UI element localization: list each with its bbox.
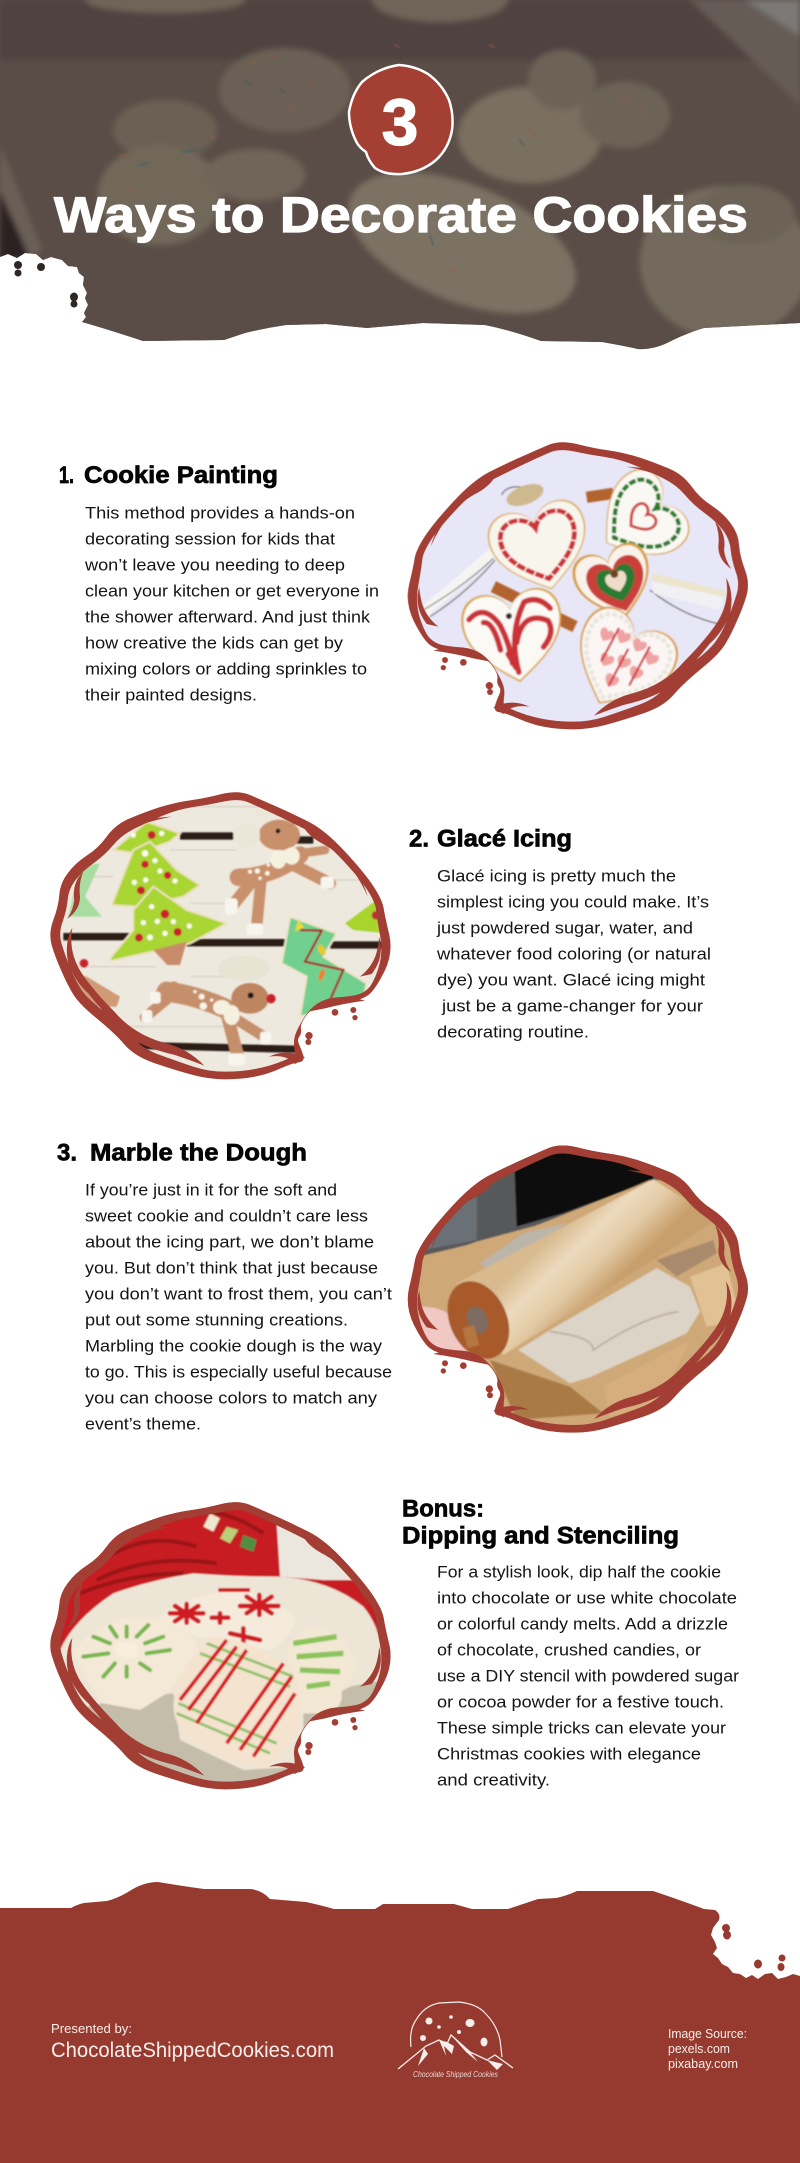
text: glace icing: Glacé icing is pretty much the: [437, 867, 676, 886]
rolling pin body: [457, 1179, 717, 1355]
heading: bonus: Dipping and Stenciling: [402, 1522, 679, 1549]
text: cookie painting: the shower afterward. And just think: [85, 608, 371, 627]
photo: plate of knit and plaid cookies in frame: [50, 1502, 391, 1790]
text: bonus: Christmas cookies with elegance: [437, 1745, 701, 1764]
logo: cookie and mountains: Chocolate Shipped Cookies: [413, 2069, 499, 2079]
heading: marble the dough: Marble the Dough: [90, 1140, 307, 1167]
scalloped frame: [408, 442, 748, 729]
text: glace icing: decorating routine.: [437, 1023, 589, 1042]
dough: [518, 1268, 700, 1383]
image source: pexels.com: [668, 2042, 730, 2056]
red swirl heart: [486, 498, 586, 590]
text: marble the dough: you can choose colors to match any: [85, 1389, 378, 1408]
panel: glace icing: [50, 792, 710, 1080]
cookie right: [304, 1691, 342, 1714]
heading: glace icing: 2.: [409, 826, 429, 853]
number badge: [349, 65, 453, 174]
text: bonus: These simple tricks can elevate your: [437, 1719, 726, 1738]
text: bonus: or cocoa powder for a festive touch.: [437, 1693, 724, 1712]
green tree: [282, 917, 367, 1017]
text: cookie painting: their painted designs.: [85, 686, 257, 705]
footer panel: [0, 1882, 800, 2163]
plaid cookie: [172, 1637, 252, 1724]
text: marble the dough: event’s theme.: [85, 1415, 201, 1434]
text: marble the dough: put out some stunning creations.: [85, 1311, 348, 1330]
cookie top: [160, 1590, 295, 1650]
text: bonus: [437, 1563, 739, 1790]
reindeer bottom: [145, 986, 265, 1058]
logo: cookie and mountains: [398, 2002, 513, 2079]
stripe heart: [460, 586, 562, 683]
marbled heart: [572, 542, 650, 616]
heading: cookie painting: 1.: [59, 462, 74, 489]
footer bite dots: [722, 1924, 786, 1971]
heading: cookie painting: Cookie Painting: [84, 462, 278, 489]
bite dots in header: [14, 261, 78, 308]
text: bonus: and creativity.: [437, 1771, 550, 1790]
text: glace icing: whatever food coloring (or natural: [436, 945, 711, 964]
text: marble the dough: sweet cookie and couldn’t care less: [85, 1207, 368, 1226]
number badge: 3: [382, 85, 418, 159]
heading: bonus: [402, 1496, 679, 1549]
text: cookie painting: [84, 504, 379, 705]
text: cookie painting: how creative the kids can get by: [85, 634, 344, 653]
photo: rolling pin and dough in frame: [408, 1146, 748, 1433]
text: bonus: or colorful candy melts. Add a drizzle: [437, 1615, 728, 1634]
photo: christmas tree and reindeer cookies in frame: [50, 792, 391, 1080]
text: glace icing: just be a game-changer for your: [441, 997, 703, 1016]
pink heart: [579, 606, 680, 704]
text: cookie painting: mixing colors or adding sprinkles to: [85, 660, 367, 679]
panel: bonus: [50, 1500, 739, 1790]
image source: pixabay.com: [668, 2057, 738, 2071]
text: glace icing: [436, 867, 711, 1042]
reindeer top: [232, 850, 330, 927]
image source: Image Source:: [668, 2027, 747, 2041]
text: glace icing: just powdered sugar, water, and: [436, 919, 693, 938]
text: cookie painting: decorating session for kids that: [85, 530, 335, 549]
text: marble the dough: Marbling the cookie dough is the way: [85, 1337, 383, 1356]
text: glace icing: dye) you want. Glacé icing might: [437, 971, 705, 990]
text: bonus: For a stylish look, dip half the cookie: [437, 1563, 721, 1582]
text: marble the dough: you don’t want to frost them, you can’t: [85, 1285, 392, 1304]
text: marble the dough: to go. This is especially useful because: [85, 1363, 392, 1382]
title: Ways to Decorate Cookies: [54, 187, 748, 243]
presented by: [51, 2021, 334, 2062]
text: glace icing: simplest icing you could make. It’s: [437, 893, 709, 912]
text: bonus: into chocolate or use white chocolate: [437, 1589, 737, 1608]
image source: [668, 2027, 747, 2071]
photo: heart cookies in frame: [408, 442, 748, 730]
text: bonus: use a DIY stencil with powdered sugar: [437, 1667, 739, 1686]
text: marble the dough: about the icing part, we don’t blame: [85, 1233, 374, 1252]
text: marble the dough: you. But don’t think that just because: [85, 1259, 378, 1278]
cookie left: [104, 1693, 166, 1710]
text: marble the dough: If you’re just in it for the soft and: [85, 1181, 337, 1200]
panel: cookie painting: [60, 442, 748, 730]
text: cookie painting: won’t leave you needing to deep: [84, 556, 345, 575]
scalloped frame: [408, 1146, 748, 1433]
plate: [60, 1573, 387, 1780]
panel: marble the dough: [57, 1142, 748, 1433]
scalloped frame mirrored: [50, 1502, 391, 1789]
header photo banner: [0, 0, 800, 360]
scalloped frame mirrored: [50, 792, 391, 1079]
pin end: [458, 1323, 480, 1347]
text: bonus: of chocolate, crushed candies, or: [437, 1641, 701, 1660]
hand: [420, 1307, 468, 1353]
text: marble the dough: [85, 1181, 392, 1434]
heading: marble the dough: 3.: [57, 1140, 77, 1167]
green heart: [605, 468, 690, 556]
heading: glace icing: Glacé Icing: [437, 826, 572, 853]
text: cookie painting: This method provides a hands-on: [85, 504, 355, 523]
presented by: ChocolateShippedCookies.com: [51, 2039, 334, 2062]
heading: bonus: Bonus:: [402, 1496, 484, 1523]
text: cookie painting: clean your kitchen or get everyone in: [85, 582, 379, 601]
trees: [110, 822, 227, 961]
presented by: Presented by:: [51, 2021, 132, 2036]
